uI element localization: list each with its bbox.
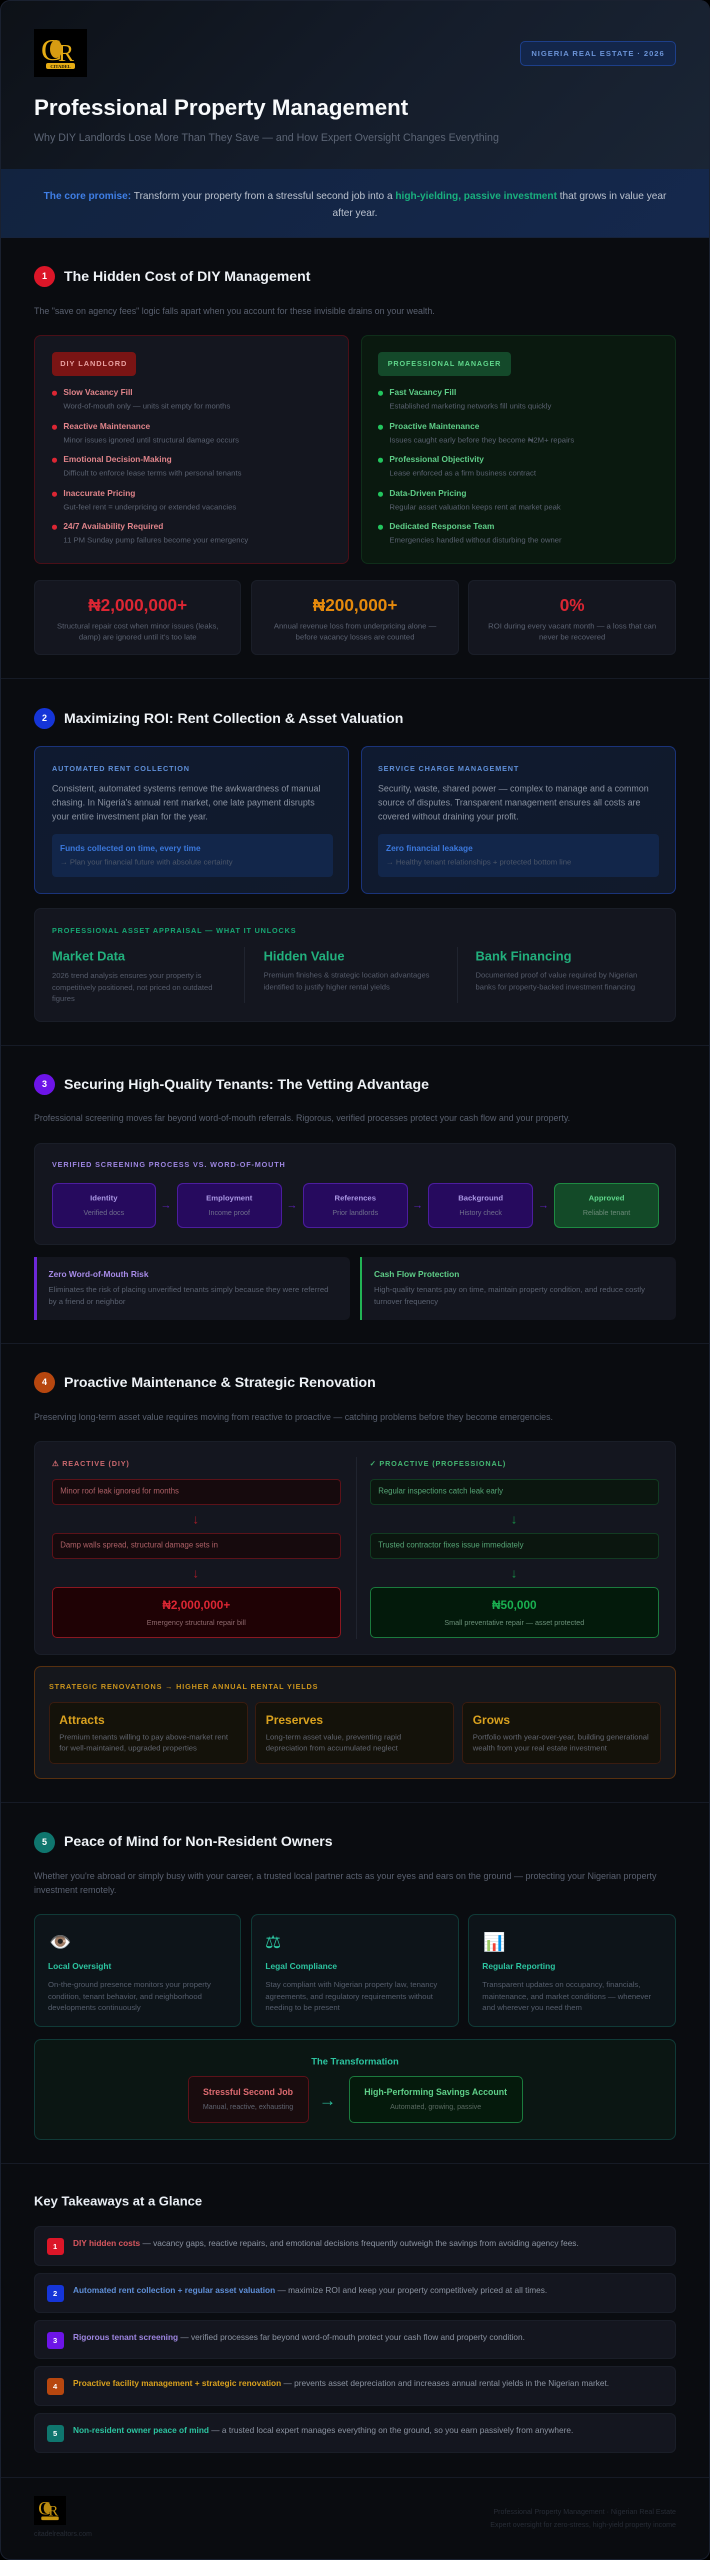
card: attracts: for well-maintained, upgraded properties [59,1743,197,1752]
panel: automated rent collection [34,746,349,894]
section 1: hidden cost [0,240,710,679]
stat: revenue loss: before vacancy losses are counted [296,632,414,641]
column: hidden value: Hidden Value [264,948,345,963]
takeaway 2 [34,2273,676,2312]
number 3: 3 [42,1079,47,1089]
arrow: ↓ [193,1566,199,1581]
badge: DIY [52,352,136,376]
number 5: 5 [42,1837,47,1847]
section 3: vetting [0,1045,710,1344]
subtitle: Why DIY Landlords Lose More Than They Save — and How Expert Oversight Changes Everything [34,132,499,144]
body text: chasing. In Nigeria's annual rent market, one late payment disrupts [52,798,315,808]
takeaway 1: DIY hidden costs — vacancy gaps, reactive repairs, and emotional decisions frequently outweigh the savings from avoiding agency fees. [73,2238,579,2248]
step: approved: Approved [589,1194,624,1203]
step: identity [52,1183,156,1228]
box: stressful second job [188,2076,308,2123]
takeaway 3: 3 [53,2336,57,2345]
arrow: → [319,2091,336,2110]
callout: funds: → Plan your financial future with absolute certainty [60,858,233,867]
note: cash flow protection: turnover frequency [374,1297,438,1306]
item list: DIY: Word-of-mouth only — units sit empty for months [63,402,230,411]
callout: leakage [378,834,658,877]
stat: vacant ROI: 0% [560,595,585,615]
step: references: References [335,1194,376,1203]
number 2: 2 [42,713,47,723]
arrow: → [538,1199,549,1211]
label: VERIFIED SCREENING PROCESS VS. WORD-OF-MOUTH [52,1160,286,1169]
card: grows: wealth from your real estate investment [473,1743,607,1752]
body text: Consistent, automated systems remove the awkwardness of manual [52,784,320,794]
stat: repair cost: damp) are ignored until it's too late [79,632,197,641]
note: zero word-of-mouth risk: Zero Word-of-Mouth Risk [48,1269,148,1279]
footer note: Professional Property Management · Nigerian Real Estate [493,2508,676,2516]
arrow: → [286,1199,298,1211]
intro text: Whether you're abroad or simply busy with your career, a trusted local partner acts as your eyes and ears on the ground — protecting your Nigerian property [34,1871,657,1881]
footer logo: R [48,2503,58,2519]
body text [52,784,320,822]
card: regular reporting: maintenance, and market conditions — whenever [482,1992,651,2001]
number 5 [34,1832,55,1853]
card: regular reporting: Transparent updates on occupancy, financials, [482,1980,640,1989]
number 1 [34,266,55,287]
box: high-performing savings [349,2076,523,2123]
column: market data [52,948,212,1003]
arrow: ↓ [511,1512,517,1527]
item list: DIY: Inaccurate Pricing [63,488,135,498]
card: attracts: Premium tenants willing to pay above-market rent [59,1733,228,1742]
note: zero word-of-mouth risk: by a friend or neighbor [48,1297,125,1306]
label: STRATEGIC RENOVATIONS → HIGHER ANNUAL RENTAL YIELDS [49,1682,318,1691]
logo: R [58,41,74,67]
logo [34,29,87,77]
label: reactive: ⚠ REACTIVE (DIY) [52,1459,130,1468]
badge: Nigeria Real Estate 2026 [520,41,676,66]
core promise banner [0,169,710,238]
card: local oversight: On-the-ground presence monitors your property [48,1980,211,1989]
takeaway 4: Proactive facility management + strategic renovation — prevents asset depreciation and increases annual rental yields in the Nigerian market. [73,2379,609,2389]
intro text: investment remotely. [34,1885,116,1895]
proactive outcome: Small preventative repair — asset protected [444,1618,584,1627]
item list: DIY [52,388,248,544]
body text [378,784,649,822]
takeaway 4: 4 [53,2382,57,2391]
heading: Maximizing ROI: Rent Collection & Asset Valuation [64,710,403,726]
step: employment: Income proof [209,1209,250,1217]
arrow: → [412,1199,423,1211]
takeaway 2: 2 [53,2289,57,2298]
card: grows: Portfolio worth year-over-year, building generational [473,1733,649,1742]
number 1: 1 [42,271,47,281]
heading: Proactive Maintenance & Strategic Renovation [64,1374,376,1390]
body text: Security, waste, shared power — complex to manage and a common [378,784,649,794]
step: identity: Identity [90,1194,118,1203]
label: AUTOMATED RENT COLLECTION [52,764,190,773]
note: zero word-of-mouth risk [34,1257,350,1320]
item list: professional: Emergencies handled without disturbing the owner [389,535,562,544]
reactive step 2 [52,1533,341,1559]
badge: Nigeria Real Estate 2026: NIGERIA REAL ESTATE · 2026 [531,49,665,58]
card: legal compliance [251,1914,459,2027]
icon: chart: 📊 [483,1932,505,1952]
proactive step 1 [370,1479,659,1505]
box: stressful second job: Manual, reactive, exhausting [203,2103,293,2111]
item list: DIY: Emotional Decision-Making [63,455,172,465]
heading: The Hidden Cost of DIY Management [64,268,310,284]
callout: funds: Funds collected on time, every time [60,843,201,853]
takeaway 3 [34,2320,676,2359]
item list: professional: Professional Objectivity [389,455,484,465]
icon: scales: ⚖ [265,1932,281,1952]
badge: professional [378,352,511,376]
item list: DIY: Slow Vacancy Fill [63,388,133,398]
section: key takeaways [0,2163,710,2478]
panel: professional manager [361,335,676,564]
card: attracts [49,1702,248,1764]
number 2 [34,708,55,729]
title: The Transformation [311,2056,399,2067]
section 4: proactive maintenance [0,1343,710,1803]
column: bank financing: Documented proof of value required by Nigerian [476,971,637,980]
proactive step 2 [370,1533,659,1559]
column: market data: competitively positioned, not priced on outdated [52,982,212,991]
column: market data: Market Data [52,948,125,963]
label: PROFESSIONAL ASSET APPRAISAL — WHAT IT UNLOCKS [52,926,296,935]
footer logo: C [38,2499,51,2520]
column: market data: 2026 trend analysis ensures your property is [52,971,201,980]
panel: screening process [34,1143,676,1245]
step: identity: Verified docs [84,1209,124,1217]
arrow: ↓ [511,1566,517,1581]
logo: CITADEL [50,64,71,69]
badge: DIY: DIY LANDLORD [60,359,127,368]
step: employment: Employment [206,1194,252,1203]
column: bank financing: Bank Financing [476,948,571,963]
panel: service charge management [361,746,676,894]
core promise banner: The core promise: Transform your property from a stressful second job into a high-yielding, passive investment that grows in value year [44,190,666,202]
step: approved: Reliable tenant [583,1209,630,1217]
footer logo [34,2496,66,2525]
card: legal compliance: needing to be present [265,2003,340,2012]
header [0,0,710,169]
card: preserves: Preserves [266,1713,323,1727]
stat: revenue loss: Annual revenue loss from underpricing alone — [274,622,436,631]
panel: asset appraisal [34,908,676,1022]
reactive outcome: Emergency structural repair bill [147,1618,246,1627]
item list: professional: Fast Vacancy Fill [389,388,456,398]
takeaway 5: 5 [53,2429,57,2438]
step: background [428,1183,533,1228]
intro text: Professional screening moves far beyond word-of-mouth referrals. Rigorous, verified processes protect your cash flow and your property. [34,1113,570,1123]
stat: vacant ROI: never be recovered [539,632,605,641]
stat: vacant ROI: ROI during every vacant month — a loss that can [488,622,656,631]
column: bank financing [476,948,637,991]
box: stressful second job: Stressful Second Job [203,2087,293,2097]
item list: professional: Established marketing networks fill units quickly [389,402,551,411]
step: approved [554,1183,659,1228]
card: preserves: depreciation from accumulated neglect [266,1743,398,1752]
label: SERVICE CHARGE MANAGEMENT [378,764,519,773]
card: regular reporting [468,1914,676,2027]
card: local oversight: Local Oversight [48,1961,111,1971]
step: employment [177,1183,282,1228]
takeaway 5: Non-resident owner peace of mind — a trusted local expert manages everything on the ground, so you earn passively from anywhere. [73,2426,573,2436]
box: high-performing savings: Automated, growing, passive [390,2103,481,2111]
column: market data: figures [52,994,75,1003]
item list: professional: Issues caught early before they become ₦2M+ repairs [389,435,574,444]
number 3 [34,1074,55,1095]
step: background: History check [459,1209,502,1217]
column: hidden value [264,948,430,991]
proactive step 1: Regular inspections catch leak early [378,1487,503,1496]
column: hidden value: Premium finishes & strategic location advantages [264,971,429,980]
step: references [303,1183,408,1228]
callout: leakage: Zero financial leakage [386,843,473,853]
panel: reactive vs proactive [34,1441,676,1655]
arrow: ↓ [193,1512,199,1527]
item list: professional: Proactive Maintenance [389,421,479,431]
website: citadelrealtors.com [34,2531,92,2538]
panel: DIY landlord [34,335,349,564]
stat: repair cost [34,580,241,655]
item list: professional [378,388,574,544]
card: local oversight: developments continuously [48,2003,141,2012]
step: references: Prior landlords [332,1209,378,1217]
intro text: The "save on agency fees" logic falls apart when you account for these invisible drains on your wealth. [34,306,435,316]
intro text [34,1871,657,1895]
heading: Key Takeaways at a Glance [34,2194,202,2209]
stat: revenue loss [251,580,459,655]
heading: Peace of Mind for Non-Resident Owners [64,1833,333,1849]
card: legal compliance: Stay compliant with Nigerian property law, tenancy [265,1980,437,1989]
callout: leakage: → Healthy tenant relationships + protected bottom line [386,858,571,867]
section 5: non-resident owners [0,1802,710,2164]
card: grows: Grows [473,1713,510,1727]
card: preserves [255,1702,454,1764]
panel: strategic renovations [34,1666,676,1779]
stat: repair cost: Structural repair cost when minor issues (leaks, [57,622,218,631]
reactive step 2: Damp walls spread, structural damage sets in [60,1541,218,1550]
item list: DIY: Reactive Maintenance [63,421,150,431]
takeaway 4 [34,2366,676,2406]
item list: DIY: Difficult to enforce lease terms with personal tenants [63,468,241,477]
takeaway 5 [34,2413,676,2453]
stat: revenue loss: ₦200,000+ [313,595,397,615]
note: cash flow protection [360,1257,676,1320]
title: Professional Property Management [34,95,408,120]
card: regular reporting: Regular Reporting [482,1961,555,1971]
stat: repair cost: ₦2,000,000+ [88,595,187,615]
card: preserves: Long-term asset value, preventing rapid [266,1733,401,1742]
note: zero word-of-mouth risk: Eliminates the risk of placing unverified tenants simply because they were referred [48,1285,328,1294]
takeaway 1 [34,2226,676,2266]
box: high-performing savings: High-Performing Savings Account [364,2087,507,2097]
takeaway 3: Rigorous tenant screening — verified processes far beyond word-of-mouth protect your cash flow and property condition. [73,2332,525,2342]
body text: source of disputes. Transparent management ensures all costs are [378,798,640,808]
heading: Securing High-Quality Tenants: The Vetting Advantage [64,1076,429,1092]
arrow: → [160,1199,172,1211]
section 2: maximizing ROI [0,680,710,1046]
card: attracts: Attracts [59,1713,105,1727]
footer [34,2496,676,2538]
takeaway 2: Automated rent collection + regular asset valuation — maximize ROI and keep your property competitively priced at all times. [73,2285,547,2295]
item list: professional: Regular asset valuation keeps rent at market peak [389,502,561,511]
body text: covered without draining your profit. [378,812,519,822]
panel: the transformation [34,2039,676,2140]
icon: eye: 👁️ [49,1932,71,1952]
core promise banner: after year. [333,208,377,218]
proactive outcome: ₦50,000 [492,1598,537,1612]
badge: professional: PROFESSIONAL MANAGER [388,359,501,368]
reactive outcome: ₦2,000,000+ [162,1598,230,1612]
column: bank financing: banks for property-backed investment financing [476,982,635,991]
item list: DIY: 11 PM Sunday pump failures become your emergency [63,535,248,544]
proactive step 2: Trusted contractor fixes issue immediately [378,1541,524,1550]
callout: funds [52,834,332,877]
proactive outcome [370,1587,659,1638]
item list: DIY: 24/7 Availability Required [63,522,163,532]
item list: professional: Lease enforced as a firm business contract [389,468,536,477]
card: regular reporting: and wherever you need them [482,2003,582,2012]
item list: DIY: Minor issues ignored until structural damage occurs [63,435,239,444]
step: background: Background [458,1194,503,1203]
footer note: Expert oversight for zero-stress, high-yield property income [490,2521,676,2529]
reactive step 1 [52,1479,341,1505]
reactive step 1: Minor roof leak ignored for months [60,1487,179,1496]
card: local oversight: condition, tenant behavior, and neighborhood [48,1992,202,2001]
card: grows [462,1702,661,1764]
logo: C [41,32,62,67]
number 4 [34,1372,55,1393]
item list: professional: Data-Driven Pricing [389,488,466,498]
card: local oversight [34,1914,241,2027]
reactive outcome [52,1587,341,1638]
item list: DIY: Gut-feel rent = underpricing or extended vacancies [63,502,236,511]
label: proactive: ✓ PROACTIVE (PROFESSIONAL) [370,1459,506,1468]
body text: your entire investment plan for the year. [52,812,208,822]
note: cash flow protection: Cash Flow Protection [374,1269,459,1279]
note: cash flow protection: High-quality tenants pay on time, maintain property condition, and reduce costly [374,1285,645,1294]
takeaway 1: 1 [53,2242,57,2251]
card: legal compliance: agreements, and regulatory requirements without [265,1992,433,2001]
intro text: Preserving long-term asset value requires moving from reactive to proactive — catching problems before they become emergencies. [34,1412,553,1422]
card: legal compliance: Legal Compliance [265,1961,337,1971]
number 4: 4 [42,1377,47,1387]
column: hidden value: identified to justify higher rental yields [264,982,390,991]
footer note [490,2508,676,2529]
stat: vacant ROI [468,580,676,655]
item list: professional: Dedicated Response Team [389,522,494,532]
